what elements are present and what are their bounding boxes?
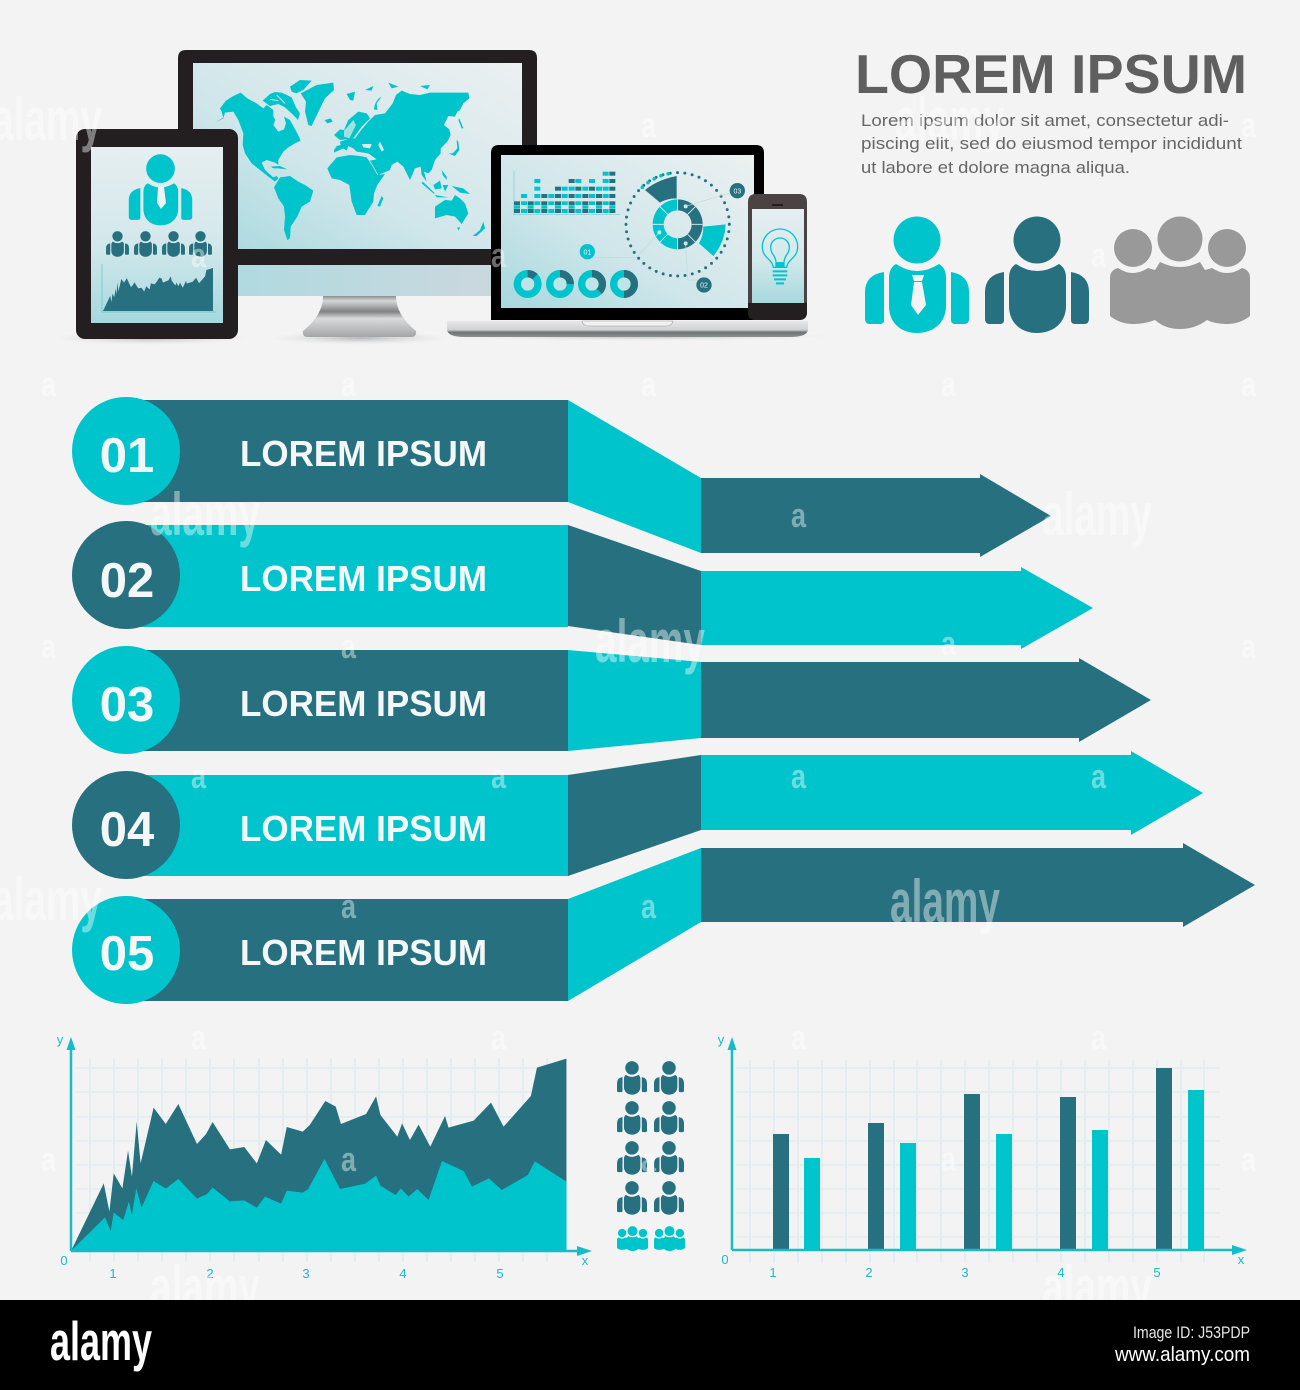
- intro text block: Lorem ipsum dolor sit amet, consectetur adi-: [861, 111, 1229, 130]
- arrow 4: [701, 751, 1203, 835]
- axis labels: y: [57, 1032, 64, 1047]
- laptop bezel: [491, 145, 764, 320]
- axis labels: 5: [496, 1266, 504, 1281]
- number 01: 01: [100, 429, 154, 483]
- axis labels: 4: [1057, 1265, 1065, 1280]
- laptop equalizer bar chart: [514, 171, 620, 215]
- tablet main person icon: [129, 154, 192, 225]
- watermarks: a: [791, 758, 807, 796]
- phone screen: [752, 209, 804, 303]
- watermarks: a: [1091, 758, 1107, 796]
- people pictogram column: [617, 1061, 685, 1251]
- circle 1: [72, 397, 180, 505]
- watermarks: a: [41, 366, 57, 404]
- arrow 3: [701, 658, 1151, 742]
- axis labels: 3: [961, 1265, 969, 1280]
- watermarks: a: [341, 628, 357, 666]
- footer logo: alamy: [50, 1310, 152, 1372]
- monitor: [178, 50, 537, 337]
- watermarks: alamy: [1042, 481, 1152, 548]
- watermarks: a: [641, 888, 657, 926]
- axis labels: [718, 1032, 1245, 1280]
- watermarks: a: [941, 1141, 957, 1179]
- image id: Image ID: J53PDP: [1133, 1323, 1250, 1342]
- watermarks: a: [1241, 628, 1257, 666]
- watermarks: a: [641, 107, 657, 145]
- label 3: LOREM IPSUM: [240, 683, 487, 724]
- intro text block: piscing elit, sed do eiusmod tempor incididunt: [861, 134, 1242, 153]
- arrow 5: [701, 843, 1255, 927]
- axis labels: 0: [721, 1252, 729, 1267]
- device group: monitor, tablet, laptop, phone: [50, 50, 835, 345]
- watermarks: a: [41, 628, 57, 666]
- tablet: [76, 129, 238, 339]
- band 5: [126, 899, 568, 1001]
- watermarks: a: [491, 1019, 507, 1057]
- watermarks: a: [941, 366, 957, 404]
- teal bars: [804, 1090, 1204, 1250]
- watermarks: a: [341, 366, 357, 404]
- axis labels: 3: [302, 1266, 310, 1281]
- step 1 ribbon: [72, 397, 1051, 557]
- axis labels: 1: [109, 1266, 117, 1281]
- watermarks: alamy: [150, 481, 260, 548]
- step 3 ribbon: [72, 646, 1151, 754]
- axis arrowheads: [66, 1037, 592, 1256]
- tablet area chart: [102, 264, 216, 312]
- icon: businessman with tie: [865, 216, 969, 333]
- step 5 ribbon: [72, 843, 1255, 1004]
- axis labels: x: [582, 1253, 589, 1268]
- icon: person: [985, 216, 1089, 333]
- laptop radial chart: [587, 173, 737, 280]
- callout 01: 01: [583, 249, 591, 256]
- arrow 2: [701, 567, 1093, 649]
- fold 2: [568, 525, 701, 645]
- bar chart: [718, 1032, 1247, 1280]
- laptop dashboard: [514, 171, 745, 294]
- watermarks: a: [1241, 1141, 1257, 1179]
- circle 5: [72, 896, 180, 1004]
- arrow 1: [701, 474, 1051, 557]
- watermarks: a: [491, 237, 507, 275]
- laptop notch: [582, 321, 673, 326]
- axis labels: 1: [769, 1265, 777, 1280]
- tablet small people icons: [106, 231, 212, 257]
- watermarks: a: [41, 1141, 57, 1179]
- watermarks: a: [641, 1141, 657, 1179]
- intro text block: [861, 111, 1242, 177]
- watermarks: a: [191, 758, 207, 796]
- watermarks: a: [941, 625, 957, 663]
- axis labels: 2: [206, 1266, 214, 1281]
- callout 03: [730, 183, 745, 198]
- phone lower body: [748, 303, 807, 320]
- callout 02: [696, 277, 712, 293]
- axis labels: y: [718, 1032, 725, 1047]
- icon: group of people: [1110, 216, 1250, 329]
- monitor screen: [193, 63, 522, 249]
- tablet body: [76, 129, 238, 339]
- number 02: 02: [100, 554, 154, 608]
- band 2: [126, 525, 568, 627]
- watermarks: a: [1091, 237, 1107, 275]
- number 05: 05: [100, 927, 154, 981]
- watermarks: a: [791, 497, 807, 535]
- phone body: [748, 194, 807, 320]
- axes: [71, 1046, 580, 1251]
- watermarks: a: [191, 1019, 207, 1057]
- watermarks: a: [341, 888, 357, 926]
- label 1: LOREM IPSUM: [240, 433, 487, 474]
- fold 1: [568, 400, 701, 553]
- watermarks: alamy: [890, 868, 1000, 935]
- watermarks: a: [641, 366, 657, 404]
- tablet screen: [91, 147, 223, 323]
- label 2: LOREM IPSUM: [240, 558, 487, 599]
- teal data series: [71, 1159, 566, 1251]
- axis labels: [57, 1032, 589, 1281]
- axis labels: 0: [60, 1253, 68, 1268]
- fold 3: [568, 650, 701, 751]
- band 4: [126, 775, 568, 876]
- step 4 ribbon: [72, 751, 1203, 879]
- laptop small donut charts: [517, 274, 634, 294]
- step 2 ribbon: [72, 521, 1093, 649]
- monitor bezel: [178, 50, 537, 265]
- callout 03: 03: [733, 188, 741, 195]
- watermarks: a: [1091, 1019, 1107, 1057]
- watermarks: alamy: [595, 608, 705, 675]
- area chart: [57, 1032, 592, 1281]
- band 1: [126, 400, 568, 502]
- icon: light bulb: [762, 229, 798, 283]
- number 03: 03: [100, 678, 154, 732]
- watermarks: alamy: [1042, 1254, 1152, 1321]
- laptop screen: [501, 155, 754, 308]
- website: www.alamy.com: [1114, 1344, 1250, 1366]
- watermarks: a: [341, 1141, 357, 1179]
- fold 4: [568, 755, 701, 876]
- circle 2: [72, 521, 180, 629]
- callout 01: [580, 244, 595, 259]
- watermarks: alamy: [150, 1254, 260, 1321]
- axis arrowheads: [728, 1037, 1247, 1255]
- phone: [748, 194, 807, 320]
- band 3: [126, 650, 568, 751]
- circle 3: [72, 646, 180, 754]
- axis labels: 5: [1153, 1265, 1161, 1280]
- axis labels: 2: [865, 1265, 873, 1280]
- laptop base: [447, 321, 808, 337]
- dark bars: [773, 1068, 1172, 1250]
- fold 5: [568, 848, 701, 1001]
- watermarks: a: [491, 758, 507, 796]
- title: LOREM IPSUM: [855, 43, 1247, 105]
- laptop: [447, 145, 808, 337]
- axes: [732, 1046, 1236, 1250]
- number 04: 04: [100, 803, 154, 857]
- footer bar: [0, 1300, 1300, 1390]
- axis labels: x: [1238, 1252, 1245, 1267]
- callout 02: 02: [700, 283, 708, 290]
- monitor stand: [303, 296, 416, 337]
- shadows under devices: [50, 331, 835, 345]
- watermarks: a: [1241, 107, 1257, 145]
- dark data series: [71, 1059, 566, 1251]
- watermarks: a: [1241, 366, 1257, 404]
- watermarks: a: [791, 1019, 807, 1057]
- watermarks: a: [191, 237, 207, 275]
- watermarks: alamy: [895, 86, 1005, 153]
- axis labels: 4: [399, 1266, 407, 1281]
- circle 4: [72, 771, 180, 879]
- label 4: LOREM IPSUM: [240, 808, 487, 849]
- world map: [215, 80, 485, 240]
- monitor chin: [178, 265, 537, 296]
- label 5: LOREM IPSUM: [240, 932, 487, 973]
- phone speaker: [772, 204, 783, 206]
- intro text block: ut labore et dolore magna aliqua.: [861, 158, 1130, 177]
